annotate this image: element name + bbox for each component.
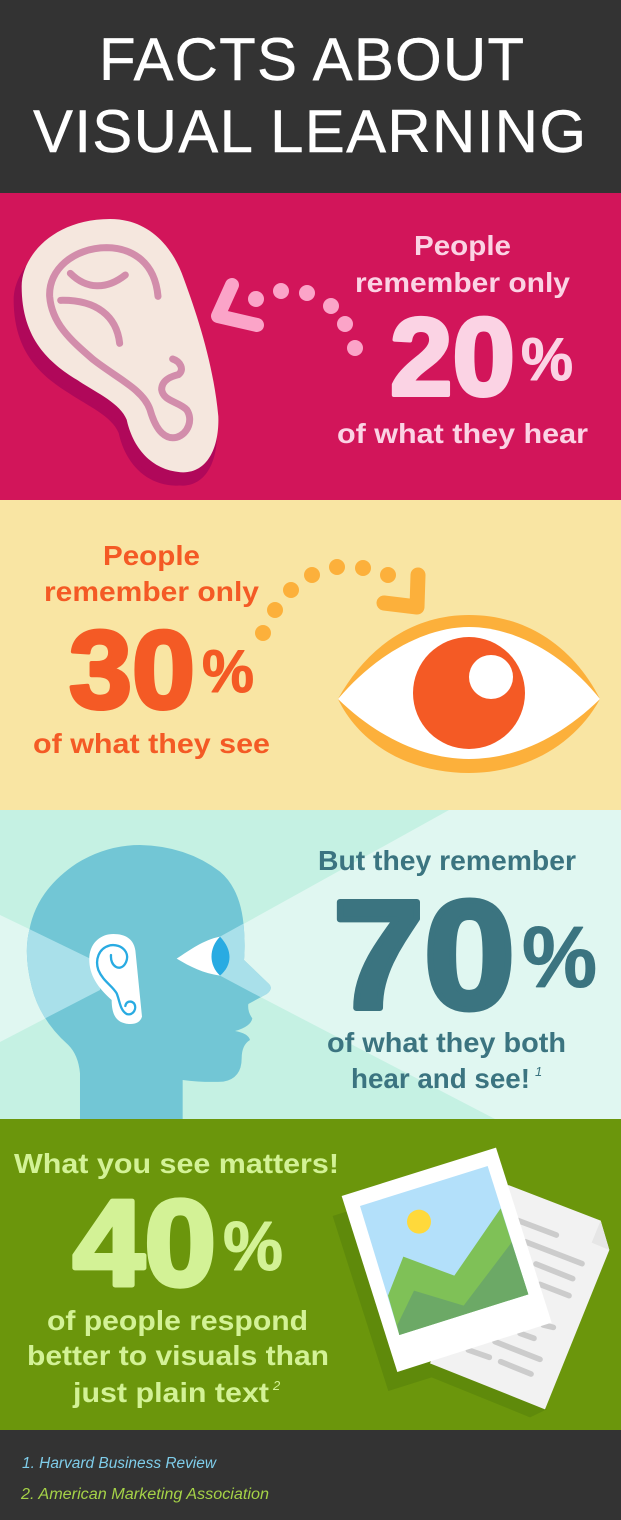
text: 30 percent of what they see: remember only xyxy=(44,576,260,607)
text: 20 percent of what they hear: 20 xyxy=(390,296,515,419)
text: 40 percent respond better to visuals: 2 xyxy=(272,1378,281,1393)
title xyxy=(33,26,586,165)
panel: visuals xyxy=(0,1119,621,1430)
panel: hearing and seeing xyxy=(0,810,621,1120)
footer: sources xyxy=(0,1430,621,1520)
text: 70 percent of what they both hear and see: hear and see! xyxy=(351,1063,530,1094)
icon: small ear xyxy=(89,934,142,1024)
text: 70 percent of what they both hear and see: 70 xyxy=(333,869,515,1041)
text: 20 percent of what they hear: remember only xyxy=(355,267,571,298)
text: 30 percent of what they see xyxy=(33,540,270,759)
icon: photo and document xyxy=(333,1148,609,1417)
title: FACTS ABOUT xyxy=(99,26,524,93)
text: 70 percent of what they both hear and see: of what they both xyxy=(327,1027,566,1058)
panel: seeing xyxy=(0,500,621,810)
text: 40 percent respond better to visuals: better to visuals than xyxy=(27,1340,329,1371)
icon: side eye xyxy=(177,937,229,976)
arrow: dotted to ear xyxy=(218,283,363,356)
panel: hearing xyxy=(0,193,621,500)
arrow: dotted to eye xyxy=(255,559,418,641)
text: 30 percent of what they see: 30 xyxy=(69,609,195,732)
text: 70 percent of what they both hear and see: % xyxy=(522,910,597,1006)
text: 70 percent of what they both hear and see xyxy=(318,845,597,1094)
text: 30 percent of what they see: of what they see xyxy=(33,728,270,759)
text: 40 percent respond better to visuals: just plain text xyxy=(72,1377,269,1408)
text: 70 percent of what they both hear and see: But they remember xyxy=(318,845,576,876)
text: 30 percent of what they see: People xyxy=(103,540,200,571)
header panel xyxy=(0,0,621,193)
icon: head profile xyxy=(26,845,271,1119)
title: VISUAL LEARNING xyxy=(33,98,586,165)
text: 70 percent of what they both hear and see: 1 xyxy=(535,1064,542,1079)
text: 30 percent of what they see: % xyxy=(202,638,254,705)
text: 20 percent of what they hear: People xyxy=(414,230,511,261)
source 2: 2. American Marketing Association xyxy=(20,1486,269,1503)
text: 40 percent respond better to visuals: of people respond xyxy=(47,1305,308,1336)
text: 40 percent respond better to visuals: 40 xyxy=(73,1175,216,1311)
text: 20 percent of what they hear: of what they hear xyxy=(337,418,588,449)
source 1: 1. Harvard Business Review xyxy=(22,1455,218,1472)
text: 20 percent of what they hear: % xyxy=(521,326,573,393)
icon: ear xyxy=(14,219,218,486)
text: 20 percent of what they hear xyxy=(337,230,588,449)
text: 40 percent respond better to visuals xyxy=(14,1148,339,1408)
icon: eye xyxy=(338,615,600,773)
text: 40 percent respond better to visuals: What you see matters! xyxy=(14,1148,339,1179)
text: 40 percent respond better to visuals: % xyxy=(223,1207,283,1285)
